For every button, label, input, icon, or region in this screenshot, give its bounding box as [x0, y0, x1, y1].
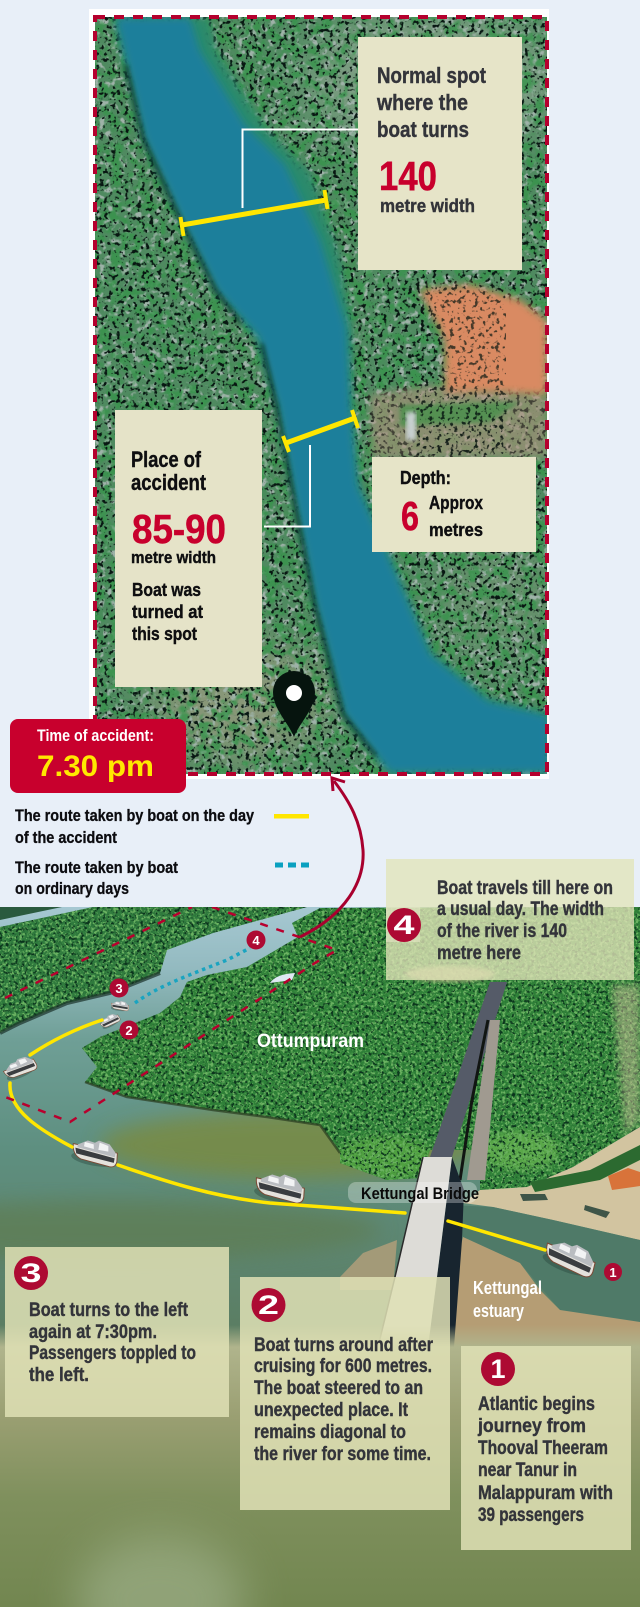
- boat 2: [100, 1014, 120, 1029]
- left palm bank: [0, 907, 330, 1037]
- estuary sand: [450, 1237, 640, 1347]
- label: Ottumpuram: Ottumpuram: [257, 1031, 364, 1052]
- legend: yellow route line: [274, 814, 309, 818]
- callout: place of accident: Boat was: [132, 580, 201, 600]
- number badge 1: 1: [490, 1354, 506, 1384]
- callout: place of accident: 85-90: [132, 506, 226, 552]
- legend: of the accident: [15, 828, 117, 847]
- callout: place of accident: Place of: [131, 447, 202, 472]
- callout 2: remains diagonal to: [254, 1422, 406, 1443]
- callout 4: [386, 859, 634, 980]
- callout: depth: Approx: [429, 493, 483, 513]
- far land strip: [0, 907, 62, 920]
- map imagery: [95, 10, 570, 774]
- callout 1: Thooval Theeram: [478, 1438, 608, 1459]
- legend: The route taken by boat: [15, 858, 178, 877]
- legend: blue dotted route line: [275, 862, 309, 868]
- marker 2: 2: [125, 1023, 133, 1038]
- service road: [467, 1020, 500, 1180]
- badge: time of accident: 7.30 pm: [37, 750, 154, 783]
- callout: depth: [372, 457, 536, 552]
- callout: depth: Depth:: [400, 468, 451, 488]
- callout 1: Atlantic begins: [478, 1394, 595, 1415]
- callout: normal spot: Normal spot: [377, 63, 487, 88]
- boat 5: [254, 1174, 305, 1204]
- label: Kettungal Bridge: Kettungal Bridge: [361, 1184, 479, 1203]
- aerial photo: [0, 907, 640, 1347]
- callout 3: [5, 1247, 229, 1417]
- callout 4: of the river is 140: [437, 921, 567, 942]
- label: Kettungal estuary: estuary: [473, 1301, 524, 1321]
- callout 3: again at 7:30pm.: [29, 1322, 157, 1343]
- marker 4: 4: [252, 933, 260, 948]
- label: Kettungal estuary: [473, 1278, 542, 1321]
- callout: normal spot: [358, 37, 522, 270]
- road: [430, 982, 507, 1157]
- number badge 2: [252, 1288, 286, 1322]
- badge: time of accident: [10, 719, 186, 793]
- callout 1: near Tanur in: [478, 1460, 577, 1481]
- boat 3: [3, 1057, 38, 1080]
- beach: [463, 1127, 640, 1240]
- number badge 2: 2: [258, 1290, 279, 1320]
- number badge 4: 4: [394, 910, 414, 940]
- callout 2: cruising for 600 metres.: [254, 1356, 432, 1377]
- label: Kettungal estuary: Kettungal: [473, 1278, 542, 1298]
- callout: depth: metres: [429, 520, 483, 540]
- red dashed frame on photo: [0, 907, 337, 1122]
- badge: time of accident: Time of accident:: [37, 726, 154, 745]
- bridge deck: [378, 1157, 452, 1347]
- number badge 3: 3: [20, 1258, 42, 1288]
- callout 4: metre here: [437, 943, 521, 964]
- callout 2: [240, 1277, 450, 1510]
- bridge shadow: [428, 1157, 464, 1347]
- marker 4: [246, 930, 266, 950]
- legend: The route taken by boat on the day: [15, 806, 254, 825]
- callout: place of accident: metre width: [131, 548, 216, 567]
- marker 3: 3: [115, 981, 123, 996]
- callout 3: the left.: [29, 1365, 89, 1386]
- callout: depth: 6: [401, 493, 419, 539]
- river water: [0, 907, 640, 1347]
- boat 1: [110, 1001, 129, 1012]
- callout 1: [461, 1346, 631, 1550]
- yellow accident route: [10, 1020, 545, 1250]
- marker 1: 1: [609, 1265, 617, 1280]
- callout 2: the river for some time.: [254, 1444, 431, 1465]
- callout: normal spot: where the: [376, 90, 468, 115]
- number badge 4: [387, 908, 421, 942]
- callout 3: Passengers toppled to: [29, 1343, 196, 1364]
- callout 4: a usual day. The width: [437, 899, 604, 920]
- marker 3: [110, 978, 128, 998]
- map dashed border: [95, 17, 547, 774]
- callout: place of accident: this spot: [132, 624, 197, 644]
- callout: place of accident: [115, 410, 262, 687]
- west sand bar: [340, 1240, 397, 1290]
- legend: on ordinary days: [15, 879, 129, 898]
- callout 1: journey from: [477, 1416, 586, 1437]
- callout 3: Boat turns to the left: [29, 1300, 189, 1321]
- callout 1: 39 passengers: [478, 1505, 584, 1526]
- connector: normal spot: [242, 130, 358, 208]
- panel: satellite map: [89, 9, 570, 779]
- measure line: 85-90 metre width: [283, 410, 358, 452]
- map white frame: [89, 9, 549, 779]
- blue ordinary route: [135, 948, 250, 1003]
- arrow: from photo to map: [300, 778, 363, 937]
- lawn and buildings on beach: [530, 1145, 640, 1192]
- callout 1: Malappuram with: [478, 1483, 613, 1504]
- connector: accident spot: [264, 445, 310, 526]
- callout: normal spot: boat turns: [377, 117, 469, 142]
- callout: place of accident: accident: [131, 470, 207, 495]
- right palm land Ottumpuram: [80, 907, 640, 1197]
- number badge 3: [14, 1256, 48, 1290]
- legend: [15, 806, 309, 898]
- olive lower background: [0, 1325, 640, 1607]
- callout: place of accident: turned at: [132, 602, 203, 622]
- number badge 1: [481, 1352, 515, 1386]
- callout 2: Boat turns around after: [254, 1335, 434, 1356]
- measure line: 140 metre width: [180, 190, 328, 236]
- marker 1: [604, 1263, 622, 1281]
- marker 2: [120, 1020, 138, 1040]
- callout 2: The boat steered to an: [254, 1378, 423, 1399]
- boat 6: [542, 1242, 596, 1278]
- icon: location pin: [273, 671, 315, 737]
- water east of bridge: [462, 1206, 640, 1322]
- boat 4: [71, 1140, 118, 1168]
- callout: normal spot: 140: [379, 153, 437, 199]
- shore line: [85, 1082, 340, 1153]
- callout: normal spot: metre width: [380, 196, 475, 216]
- distant boat: [270, 973, 295, 983]
- callout 2: unexpected place. It: [254, 1400, 409, 1421]
